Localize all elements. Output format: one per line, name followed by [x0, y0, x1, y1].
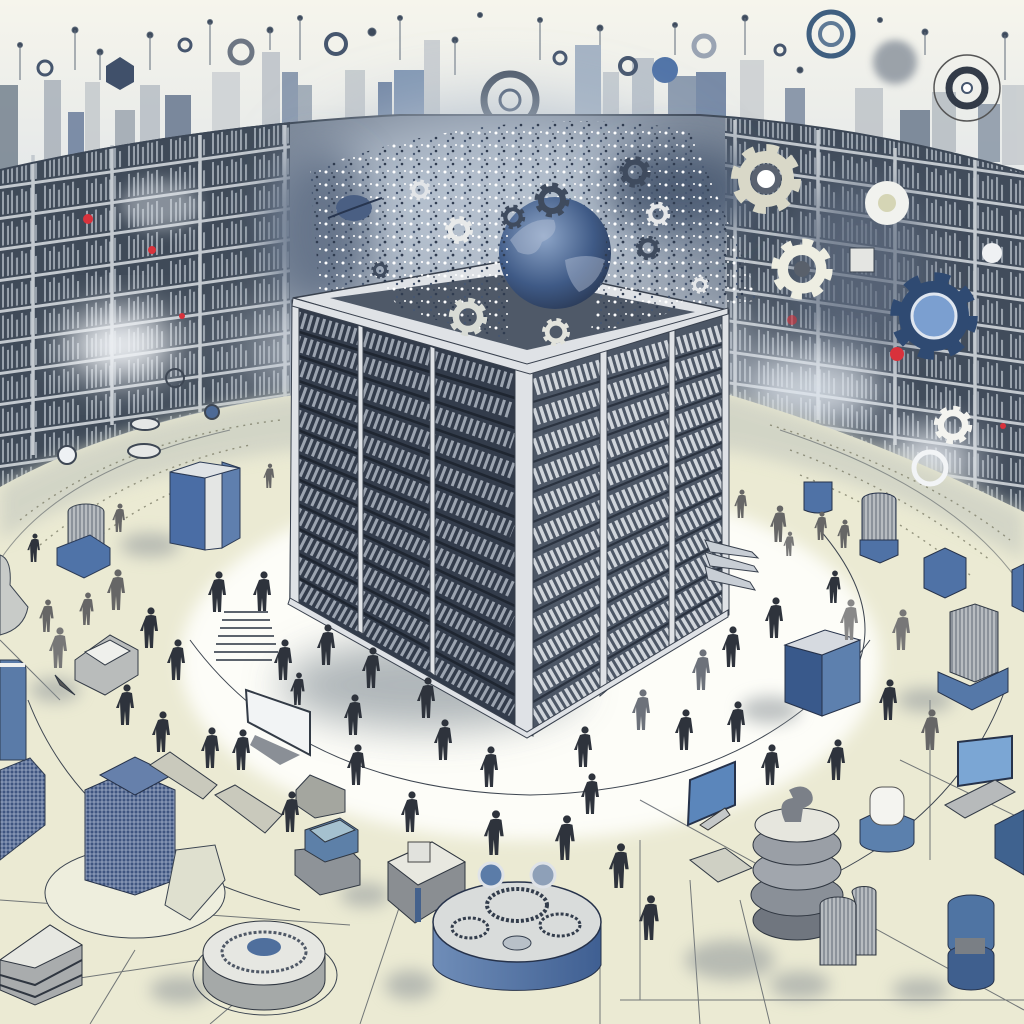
blue cylinder tower left [0, 660, 45, 860]
monitor and keyboard right [945, 736, 1015, 818]
white and blue cylinder [860, 787, 914, 852]
book blocks left [170, 462, 240, 550]
right side large gears [738, 151, 1002, 484]
round table [433, 863, 601, 990]
blue cylinders bottom right [948, 895, 994, 990]
floor shading near wall [0, 395, 1024, 560]
background sky [0, 0, 1024, 240]
cube shadow [280, 640, 580, 730]
stacked books center bottom [388, 842, 465, 923]
object shadows on the floor [30, 533, 953, 1004]
globe [499, 197, 611, 309]
right face shelves [533, 343, 726, 702]
blue book block right [785, 630, 860, 716]
round device bottom left [193, 921, 337, 1015]
floor [0, 395, 1024, 1024]
left face shelves [293, 330, 515, 695]
gears cluster [373, 159, 707, 343]
stairs left of cube [214, 612, 278, 660]
left edge stack [0, 555, 28, 635]
cube right face [532, 312, 728, 735]
small floating discs on left [58, 369, 219, 464]
data particles [310, 121, 760, 320]
white central plaza [180, 480, 880, 840]
blue book stack [295, 818, 360, 895]
monitor near cube [246, 690, 310, 765]
stacked disks [751, 786, 843, 940]
left face book rows [296, 319, 513, 709]
planet and red sparks [83, 195, 1006, 429]
cube left face [290, 305, 515, 726]
people [27, 464, 939, 940]
device stack left [55, 635, 138, 695]
cylinder server left [57, 504, 110, 578]
cube top opening [293, 262, 728, 366]
book stack bottom left [0, 925, 82, 1005]
grey mesh cylinder [820, 887, 876, 965]
small blue boxes right [804, 482, 1024, 612]
central book cube [288, 262, 758, 738]
blue mesh tower on plinth [45, 757, 225, 938]
pulled out books [705, 540, 758, 590]
right face book rows [535, 332, 725, 717]
city skyline [0, 40, 1024, 170]
mesh tower right [938, 604, 1008, 710]
keyboards on floor [150, 752, 345, 833]
particles dusting the globe and cube top [360, 220, 700, 340]
mist cloud around the data swirl [65, 110, 975, 490]
curved library wall [0, 115, 1024, 512]
floor tick marks [20, 420, 1010, 575]
keyboard right center [690, 848, 752, 882]
blue box right edge [995, 810, 1024, 875]
tiny nodes along the top edge [18, 12, 1008, 80]
monitor right center [688, 762, 735, 830]
top row of floating gears and nodes [38, 12, 1000, 126]
floor circuit lines [0, 430, 1024, 1024]
cube frame posts [288, 298, 729, 738]
